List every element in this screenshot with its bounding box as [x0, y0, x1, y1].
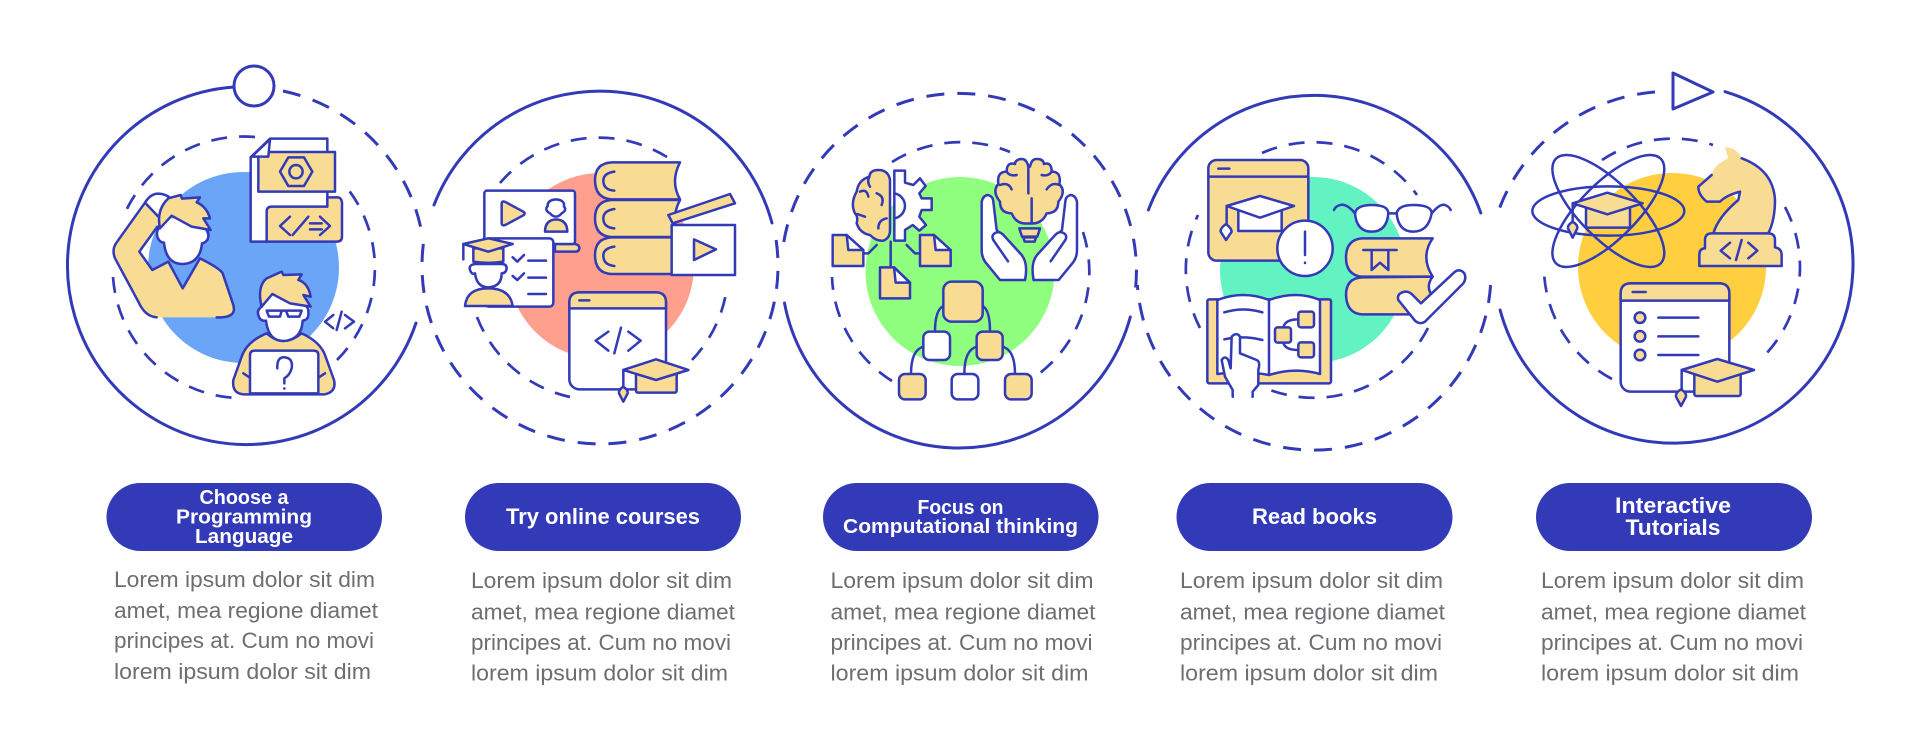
text block: step 1: lorem ipsum dolor sit dim	[114, 659, 371, 684]
text block: step 5: lorem ipsum dolor sit dim	[1541, 660, 1799, 686]
outer ring solid arc	[434, 91, 772, 223]
icon: open book with hand	[1207, 295, 1331, 400]
heading pill: step 3: Computational thinking	[843, 516, 1078, 538]
heading pill: step 5	[1536, 483, 1812, 551]
green background disc	[866, 177, 1054, 366]
icon: code document	[251, 139, 342, 242]
icon: online courses	[463, 162, 735, 402]
inner dashed ring	[1544, 139, 1800, 379]
icon: computational thinking	[833, 159, 1077, 399]
text block: step 4: lorem ipsum dolor sit dim	[1180, 660, 1438, 686]
icon: graduation cap	[619, 359, 688, 402]
text block: step 1	[114, 567, 378, 684]
icon: exclamation circle	[1277, 221, 1333, 276]
icon: video monitor	[484, 191, 579, 252]
text block: step 1: Lorem ipsum dolor sit dim	[114, 567, 375, 592]
text block: step 4: Lorem ipsum dolor sit dim	[1180, 568, 1443, 593]
text block: step 2: principes at. Cum no movi	[471, 630, 731, 655]
heading pill: step 5: Tutorials	[1626, 515, 1720, 540]
icon: video clapper	[668, 194, 735, 275]
icon: books with check	[1346, 238, 1465, 323]
text block: step 5: Lorem ipsum dolor sit dim	[1541, 568, 1804, 593]
icon: checklist window	[1621, 283, 1729, 392]
text block: step 3: lorem ipsum dolor sit dim	[830, 660, 1088, 686]
yellow background disc	[1578, 173, 1766, 361]
icon: interactive tutorials	[1532, 139, 1782, 406]
outer ring dashed arc	[784, 93, 1136, 290]
outer ring solid arc	[67, 87, 416, 445]
outer ring solid arc	[1500, 92, 1853, 443]
heading pill: step 1: Programming	[176, 506, 312, 528]
icon: decision tree	[899, 282, 1032, 399]
teal background disc	[1220, 177, 1406, 363]
icon: code window	[569, 292, 666, 389]
icon: glasses	[1334, 205, 1451, 232]
icon: person at laptop	[233, 272, 354, 394]
inner dashed ring	[832, 142, 1089, 381]
outer ring dashed arc	[1497, 92, 1655, 215]
text block: step 2: lorem ipsum dolor sit dim	[471, 660, 728, 686]
icon: thinking person	[114, 194, 234, 317]
text block: step 1: principes at. Cum no movi	[114, 628, 374, 653]
panel: step 3 computational thinking	[784, 93, 1136, 448]
heading pill: step 2: Try online courses	[506, 504, 700, 529]
text block: step 5: principes at. Cum no movi	[1541, 630, 1803, 655]
outer ring solid arc	[1148, 95, 1481, 213]
inner dashed ring	[477, 138, 727, 397]
outer ring dashed arc	[422, 240, 778, 444]
triangle marker	[1673, 73, 1713, 109]
panel: step 1 programming language	[67, 66, 422, 445]
text block: step 2: Lorem ipsum dolor sit dim	[471, 568, 732, 593]
text block: step 4	[1180, 568, 1445, 686]
icon: graduation cap	[1676, 359, 1754, 406]
icon: programmer and code files	[114, 139, 354, 394]
text block: step 4: principes at. Cum no movi	[1180, 630, 1442, 655]
inner dashed ring	[1186, 142, 1428, 398]
inner dashed ring	[113, 136, 375, 398]
text block: step 3	[830, 568, 1096, 686]
text block: step 5	[1541, 568, 1806, 686]
panel: step 4 read books	[1137, 95, 1491, 450]
circle marker	[234, 66, 274, 106]
outer ring solid arc	[784, 303, 1130, 448]
icon: brain and gear	[853, 170, 932, 241]
text block: step 2	[471, 568, 735, 686]
heading pill: step 3: Focus on	[918, 497, 1004, 519]
text block: step 5: amet, mea regione diamet	[1541, 600, 1806, 624]
text block: step 2: amet, mea regione diamet	[471, 600, 735, 624]
text block: step 3: principes at. Cum no movi	[830, 630, 1092, 655]
heading pill: step 3	[823, 483, 1098, 551]
panel: step 2 online courses	[422, 91, 778, 444]
icon: document nodes	[833, 235, 951, 298]
icon: stacked books	[595, 162, 680, 274]
heading pill: step 2	[465, 483, 741, 551]
heading pill: step 4	[1176, 483, 1452, 551]
heading pill: step 1: Language	[195, 526, 293, 548]
text block: step 3: Lorem ipsum dolor sit dim	[830, 568, 1094, 593]
outer ring dashed arc	[283, 91, 422, 232]
icon: reading books	[1207, 160, 1465, 400]
blue background disc	[148, 172, 339, 363]
heading pill: step 1	[106, 483, 382, 551]
text block: step 3: amet, mea regione diamet	[830, 600, 1096, 624]
coral background disc	[508, 173, 694, 359]
icon: student with checklist	[463, 238, 553, 307]
icon: education window	[1208, 160, 1308, 261]
heading pill: step 4: Read books	[1252, 504, 1377, 529]
heading pill: step 1: Choose a	[200, 487, 289, 509]
outer ring dashed arc	[1137, 285, 1491, 450]
text block: step 4: amet, mea regione diamet	[1180, 600, 1445, 624]
panel: step 5 interactive tutorials	[1497, 73, 1853, 443]
icon: chess knight with code	[1698, 147, 1782, 266]
heading pill: step 5: Interactive	[1615, 493, 1731, 518]
icon: atom with graduation cap	[1532, 139, 1684, 283]
text block: step 1: amet, mea regione diamet	[114, 598, 378, 623]
icon: hands holding brain bulb	[982, 159, 1077, 280]
